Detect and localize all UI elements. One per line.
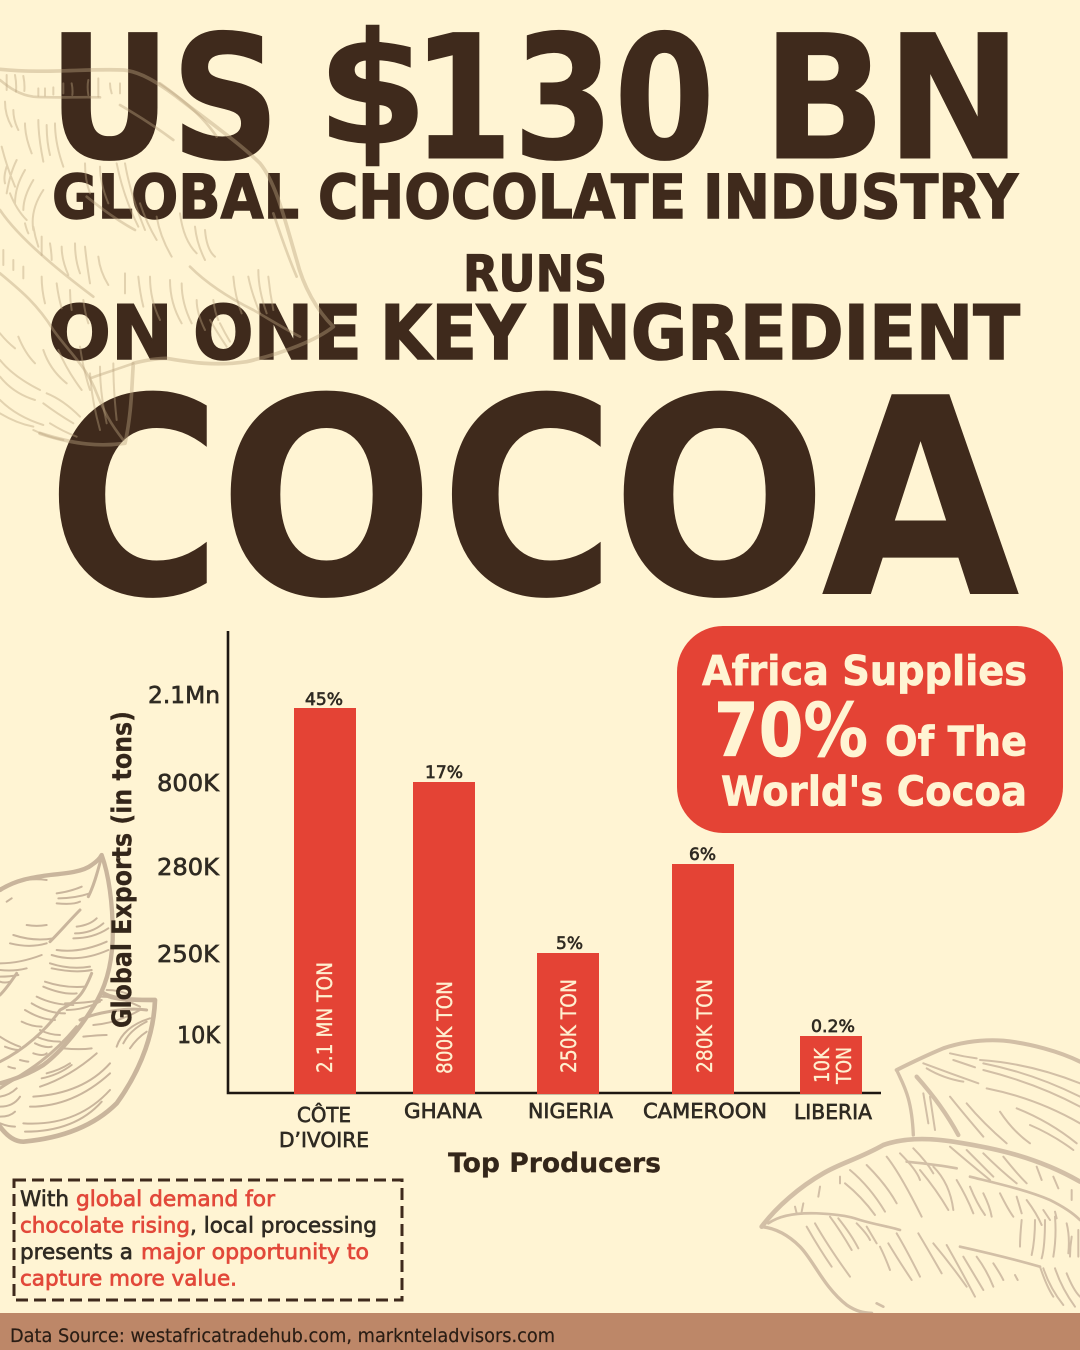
- country labels: CAMEROON: [643, 1099, 767, 1123]
- headline: US $130 BN: US: [48, 0, 280, 199]
- y axis tick labels: 280K: [157, 855, 220, 881]
- bar value labels: 10K: [810, 1047, 834, 1083]
- heading: on one key ingredient: [48, 289, 1020, 377]
- headline: cocoa: A: [821, 340, 1022, 659]
- country labels: LIBERIA: [794, 1100, 872, 1124]
- y axis tick labels: [148, 683, 221, 1049]
- y axis tick labels: 2.1Mn: [148, 683, 220, 709]
- callout: africa supplies 70%: World's Cocoa: [721, 768, 1027, 816]
- bar value labels: 800K TON: [433, 981, 457, 1074]
- footer: data source: [0, 1313, 1080, 1350]
- takeaway note: major opportunity to: [141, 1240, 369, 1265]
- bar value labels: 280K TON: [693, 979, 717, 1073]
- callout: africa supplies 70%: [677, 626, 1063, 833]
- country labels: [279, 1099, 872, 1152]
- headline: US $130 BN: [48, 0, 1022, 199]
- headline: US $130 BN: $: [317, 0, 428, 180]
- takeaway note: , local processing: [190, 1214, 377, 1238]
- x axis title: Top Producers: [448, 1148, 661, 1179]
- chart axes: [228, 631, 881, 1093]
- decorative cocoa pod: top left: [0, 69, 333, 445]
- heading: global chocolate industry: [52, 162, 1019, 233]
- heading: global chocolate industry: CHOCOLATE: [318, 162, 686, 233]
- takeaway note: capture more value.: [20, 1266, 237, 1292]
- heading: on one key ingredient: ONE: [193, 289, 362, 377]
- percentage labels: 5%: [556, 934, 583, 954]
- takeaway note: global demand for: [76, 1187, 275, 1212]
- heading: global chocolate industry: INDUSTRY: [703, 162, 1019, 233]
- heading: on one key ingredient: INGREDIENT: [548, 289, 1020, 377]
- bar value labels: 250K TON: [557, 979, 581, 1073]
- y axis tick labels: 10K: [177, 1023, 221, 1049]
- takeaway note: presents a: [20, 1240, 133, 1265]
- headline: US $130 BN: BN: [762, 0, 1022, 199]
- bar value labels: TON: [832, 1047, 856, 1085]
- callout: africa supplies 70%: Africa Supplies: [702, 647, 1027, 695]
- bar chart: top producers: [107, 631, 881, 1179]
- country labels: GHANA: [404, 1099, 482, 1123]
- bar value labels: [313, 962, 856, 1085]
- headline: cocoa: [47, 340, 1022, 659]
- callout: africa supplies 70%: 70%: [714, 688, 868, 774]
- percentage labels: 6%: [689, 845, 716, 865]
- takeaway note: With: [20, 1187, 69, 1212]
- y axis tick labels: 800K: [157, 771, 220, 797]
- percentage labels: 17%: [425, 763, 463, 783]
- takeaway note: [14, 1180, 402, 1300]
- headline: US $130 BN: 130: [412, 0, 715, 199]
- country labels: NIGERIA: [528, 1099, 613, 1123]
- percentage labels: [305, 690, 855, 1037]
- y axis tick labels: 250K: [157, 942, 220, 968]
- headline: cocoa: O: [611, 340, 828, 659]
- heading: on one key ingredient: KEY: [380, 289, 526, 377]
- heading: runs: RUNS: [463, 245, 607, 303]
- y axis title: Global Exports (in tons): [107, 711, 138, 1028]
- callout: africa supplies 70%: Of The: [885, 718, 1027, 766]
- title block: [47, 0, 1022, 659]
- country labels: CÔTE: [297, 1102, 351, 1127]
- decorative cocoa pods: bottom right: [762, 1040, 1080, 1313]
- headline: cocoa: O: [218, 340, 435, 659]
- takeaway note: chocolate rising: [20, 1214, 190, 1238]
- bars: [294, 708, 862, 1094]
- headline: cocoa: C: [47, 340, 222, 659]
- percentage labels: 45%: [305, 690, 343, 710]
- headline: cocoa: C: [440, 340, 616, 659]
- decorative cocoa pods: left: [0, 855, 155, 1142]
- heading: on one key ingredient: ON: [48, 289, 173, 377]
- country labels: D’IVOIRE: [279, 1128, 369, 1152]
- bar value labels: 2.1 MN TON: [313, 962, 337, 1073]
- footer: data source: Data Source: westafricatradehub.com, marknteladvisors.com: [10, 1325, 555, 1347]
- heading: global chocolate industry: GLOBAL: [52, 162, 299, 233]
- percentage labels: 0.2%: [811, 1017, 855, 1037]
